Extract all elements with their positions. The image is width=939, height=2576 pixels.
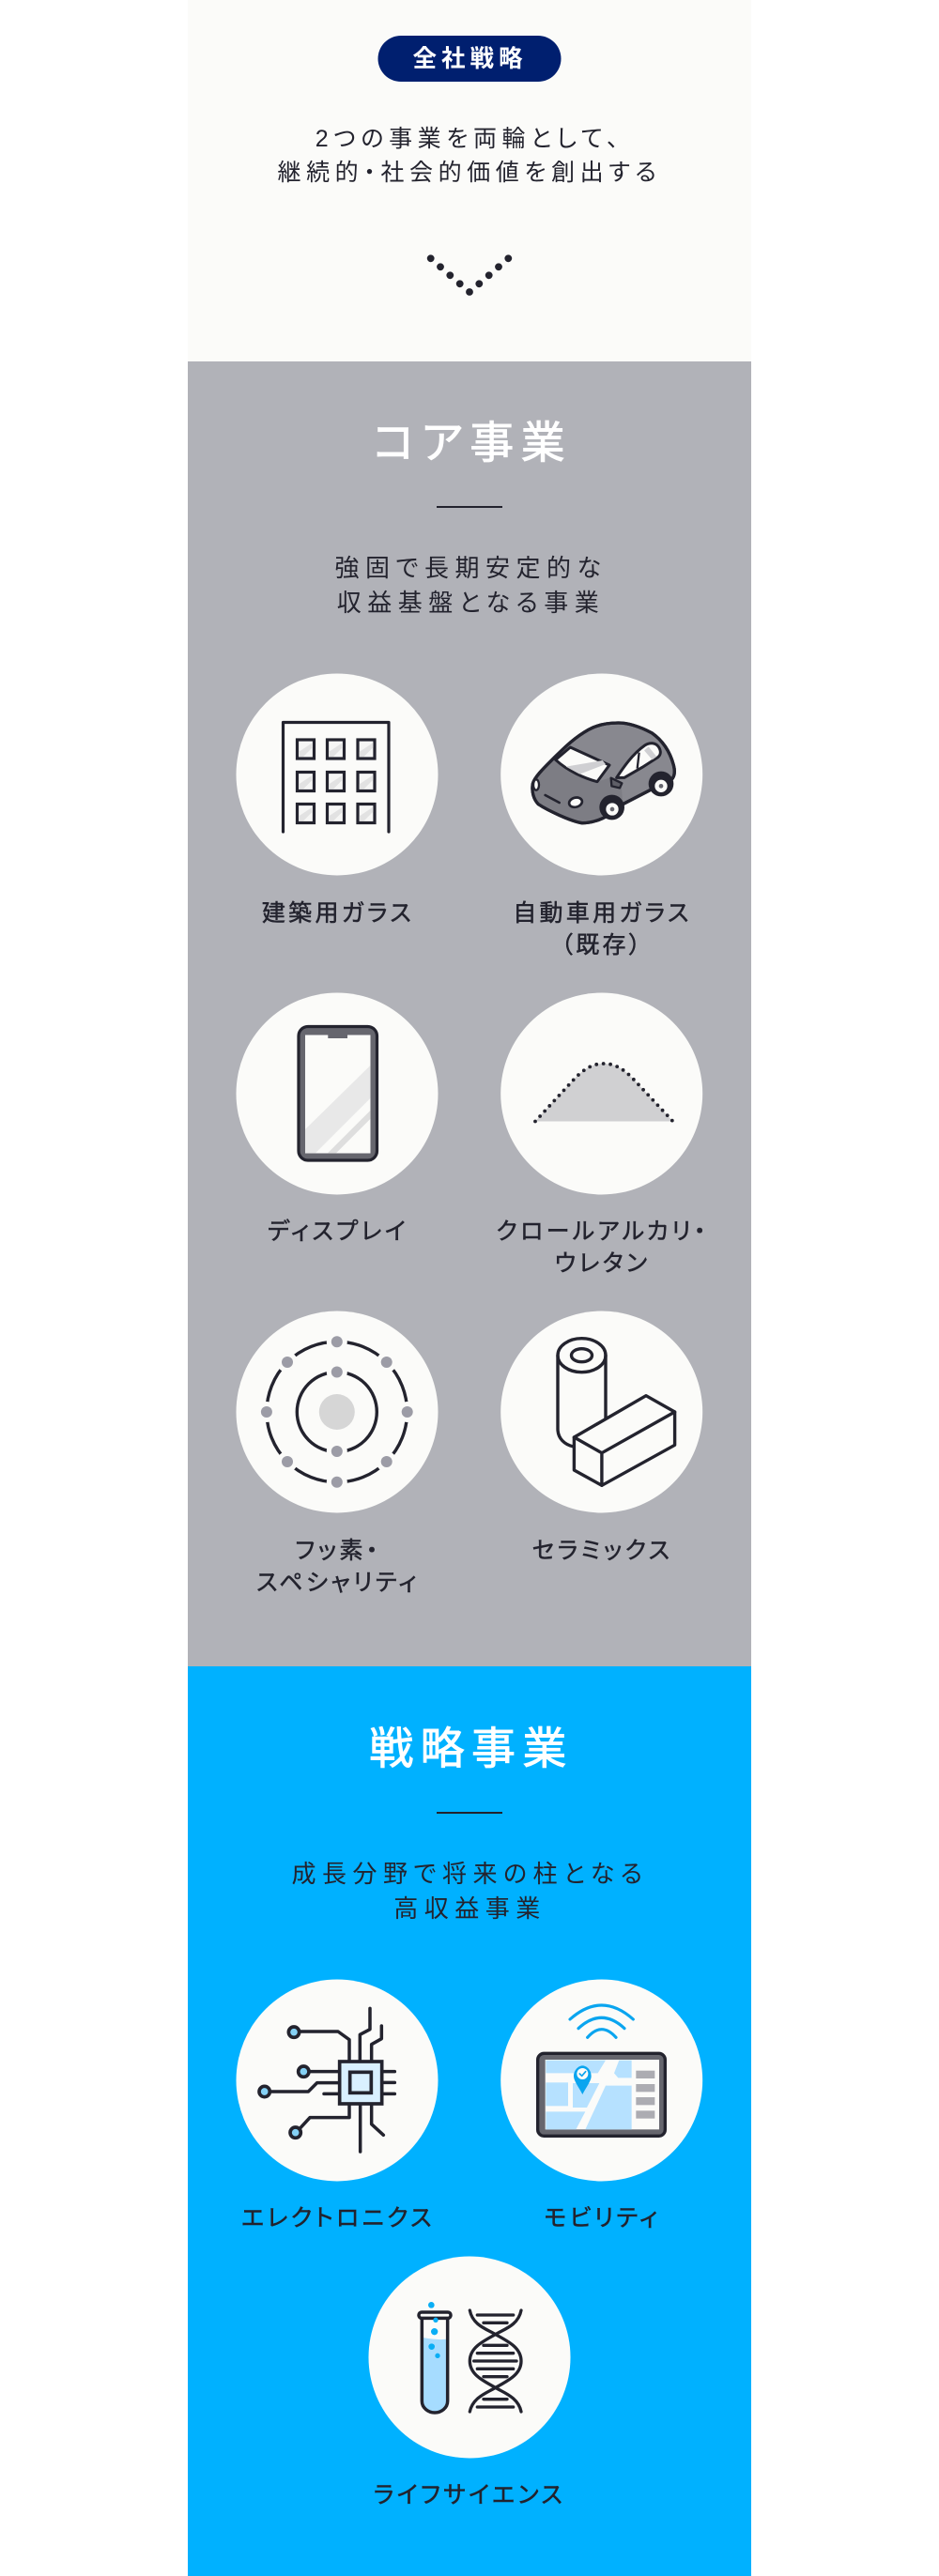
strategic description text: [291, 1860, 649, 1923]
label: クロールアルカリ・ウレタン: ウレタン: [555, 1250, 650, 1277]
label: 建築用ガラス: 建築用ガラス: [262, 900, 414, 927]
label: フッ素・スペシャリティ: スペシャリティ: [256, 1570, 420, 1596]
icon: building: [284, 723, 389, 832]
label: クロールアルカリ・ウレタン: クロールアルカリ・: [496, 1219, 709, 1245]
item: fluorine and specialty: [237, 1311, 438, 1596]
label: 自動車用ガラス（既存）: （既存）: [561, 932, 644, 958]
label: エレクトロニクス: エレクトロニクス: [241, 2205, 435, 2231]
arrow: dotted chevron down: [427, 254, 512, 296]
label: ディスプレイ: ディスプレイ: [268, 1219, 408, 1245]
item: electronics: [237, 1979, 438, 2231]
item: architectural glass: [237, 674, 438, 927]
heading: コア事業: コア事業: [373, 418, 572, 468]
badge: 全社戦略: [377, 36, 562, 82]
label: 自動車用ガラス（既存）: 自動車用ガラス: [513, 900, 692, 927]
strategic description text: 成長分野で将来の柱となる: [291, 1860, 649, 1888]
badge: 全社戦略: 全社戦略: [412, 46, 528, 72]
item: automotive glass: [500, 674, 702, 958]
item: mobility: [500, 1979, 702, 2231]
icon: navigation display with wifi: [538, 2005, 665, 2136]
item: chlor-alkali and urethane: [496, 993, 709, 1277]
label: フッ素・スペシャリティ: [256, 1538, 420, 1596]
label: クロールアルカリ・ウレタン: [496, 1219, 709, 1277]
item: life science: [368, 2257, 571, 2508]
heading: 戦略事業: 戦略事業: [369, 1724, 574, 1773]
label: モビリティ: モビリティ: [544, 2205, 661, 2231]
lead text: 継続的・社会的価値を創出する: [277, 160, 662, 186]
strategic description text: 高収益事業: [393, 1894, 546, 1923]
icon: ceramic cylinder and block: [558, 1339, 675, 1485]
icon: atom: [256, 1331, 418, 1493]
label: ライフサイエンス: ライフサイエンス: [374, 2482, 565, 2508]
core description text: 収益基盤となる事業: [337, 589, 605, 617]
core description text: [334, 554, 608, 617]
label: フッ素・スペシャリティ: フッ素・: [295, 1538, 381, 1564]
item: ceramics: [500, 1311, 702, 1564]
label: 自動車用ガラス（既存）: [513, 900, 692, 958]
icon: test tube and DNA: [419, 2302, 521, 2413]
icon: circuit chip: [259, 2008, 394, 2152]
lead text: 2つの事業を両輪として、: [316, 126, 623, 152]
icon: car: [532, 723, 674, 823]
lead text: [277, 126, 662, 186]
label: セラミックス: セラミックス: [532, 1538, 672, 1564]
panel: strategic business: [188, 1666, 751, 2576]
panel: core business: [188, 361, 751, 1666]
core description text: 強固で長期安定的な: [334, 554, 608, 582]
panel: company strategy intro: [188, 0, 751, 361]
icon: smartphone: [299, 1027, 377, 1160]
icon: dotted curve: [535, 1064, 673, 1121]
item: display: [237, 993, 438, 1245]
